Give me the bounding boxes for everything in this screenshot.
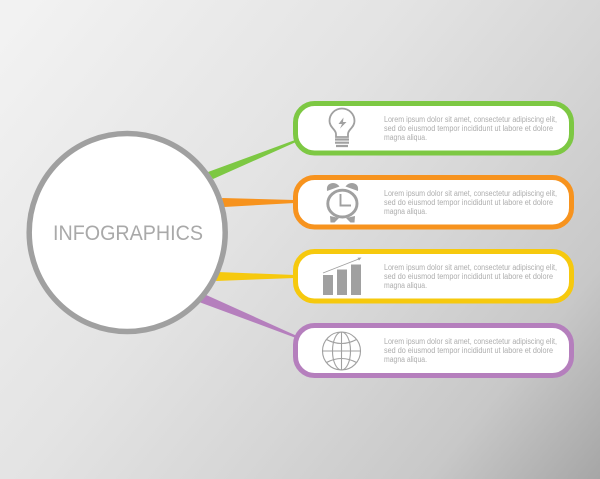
connector: green [208,140,296,179]
text block: magna aliqua. [384,355,427,364]
text block: sed do eiusmod tempor incididunt ut labore et dolore [384,346,553,355]
panel: orange [296,178,572,227]
panel: purple [296,326,572,376]
panel: green [296,104,572,153]
text block: magna aliqua. [384,207,427,216]
text block: Lorem ipsum dolor sit amet, consectetur adipiscing elit, [384,263,557,272]
connector: purple [199,294,297,338]
panel: yellow [296,252,572,301]
text block: sed do eiusmod tempor incididunt ut labore et dolore [384,272,553,281]
connector: yellow [216,272,295,281]
icon: light bulb [330,108,354,146]
text block: sed do eiusmod tempor incididunt ut labore et dolore [384,124,553,133]
icon: alarm clock [327,183,358,222]
connector: orange [222,198,295,207]
text block: sed do eiusmod tempor incididunt ut labore et dolore [384,198,553,207]
text block: Lorem ipsum dolor sit amet, consectetur adipiscing elit, [384,115,557,124]
text block: Lorem ipsum dolor sit amet, consectetur adipiscing elit, [384,189,557,198]
text block: magna aliqua. [384,133,427,142]
icon: bar chart [323,258,362,295]
icon: globe [322,332,360,370]
central circle [29,134,225,332]
text block: Lorem ipsum dolor sit amet, consectetur adipiscing elit, [384,337,557,346]
text block: magna aliqua. [384,281,427,290]
title: INFOGRAPHICS [53,222,203,245]
